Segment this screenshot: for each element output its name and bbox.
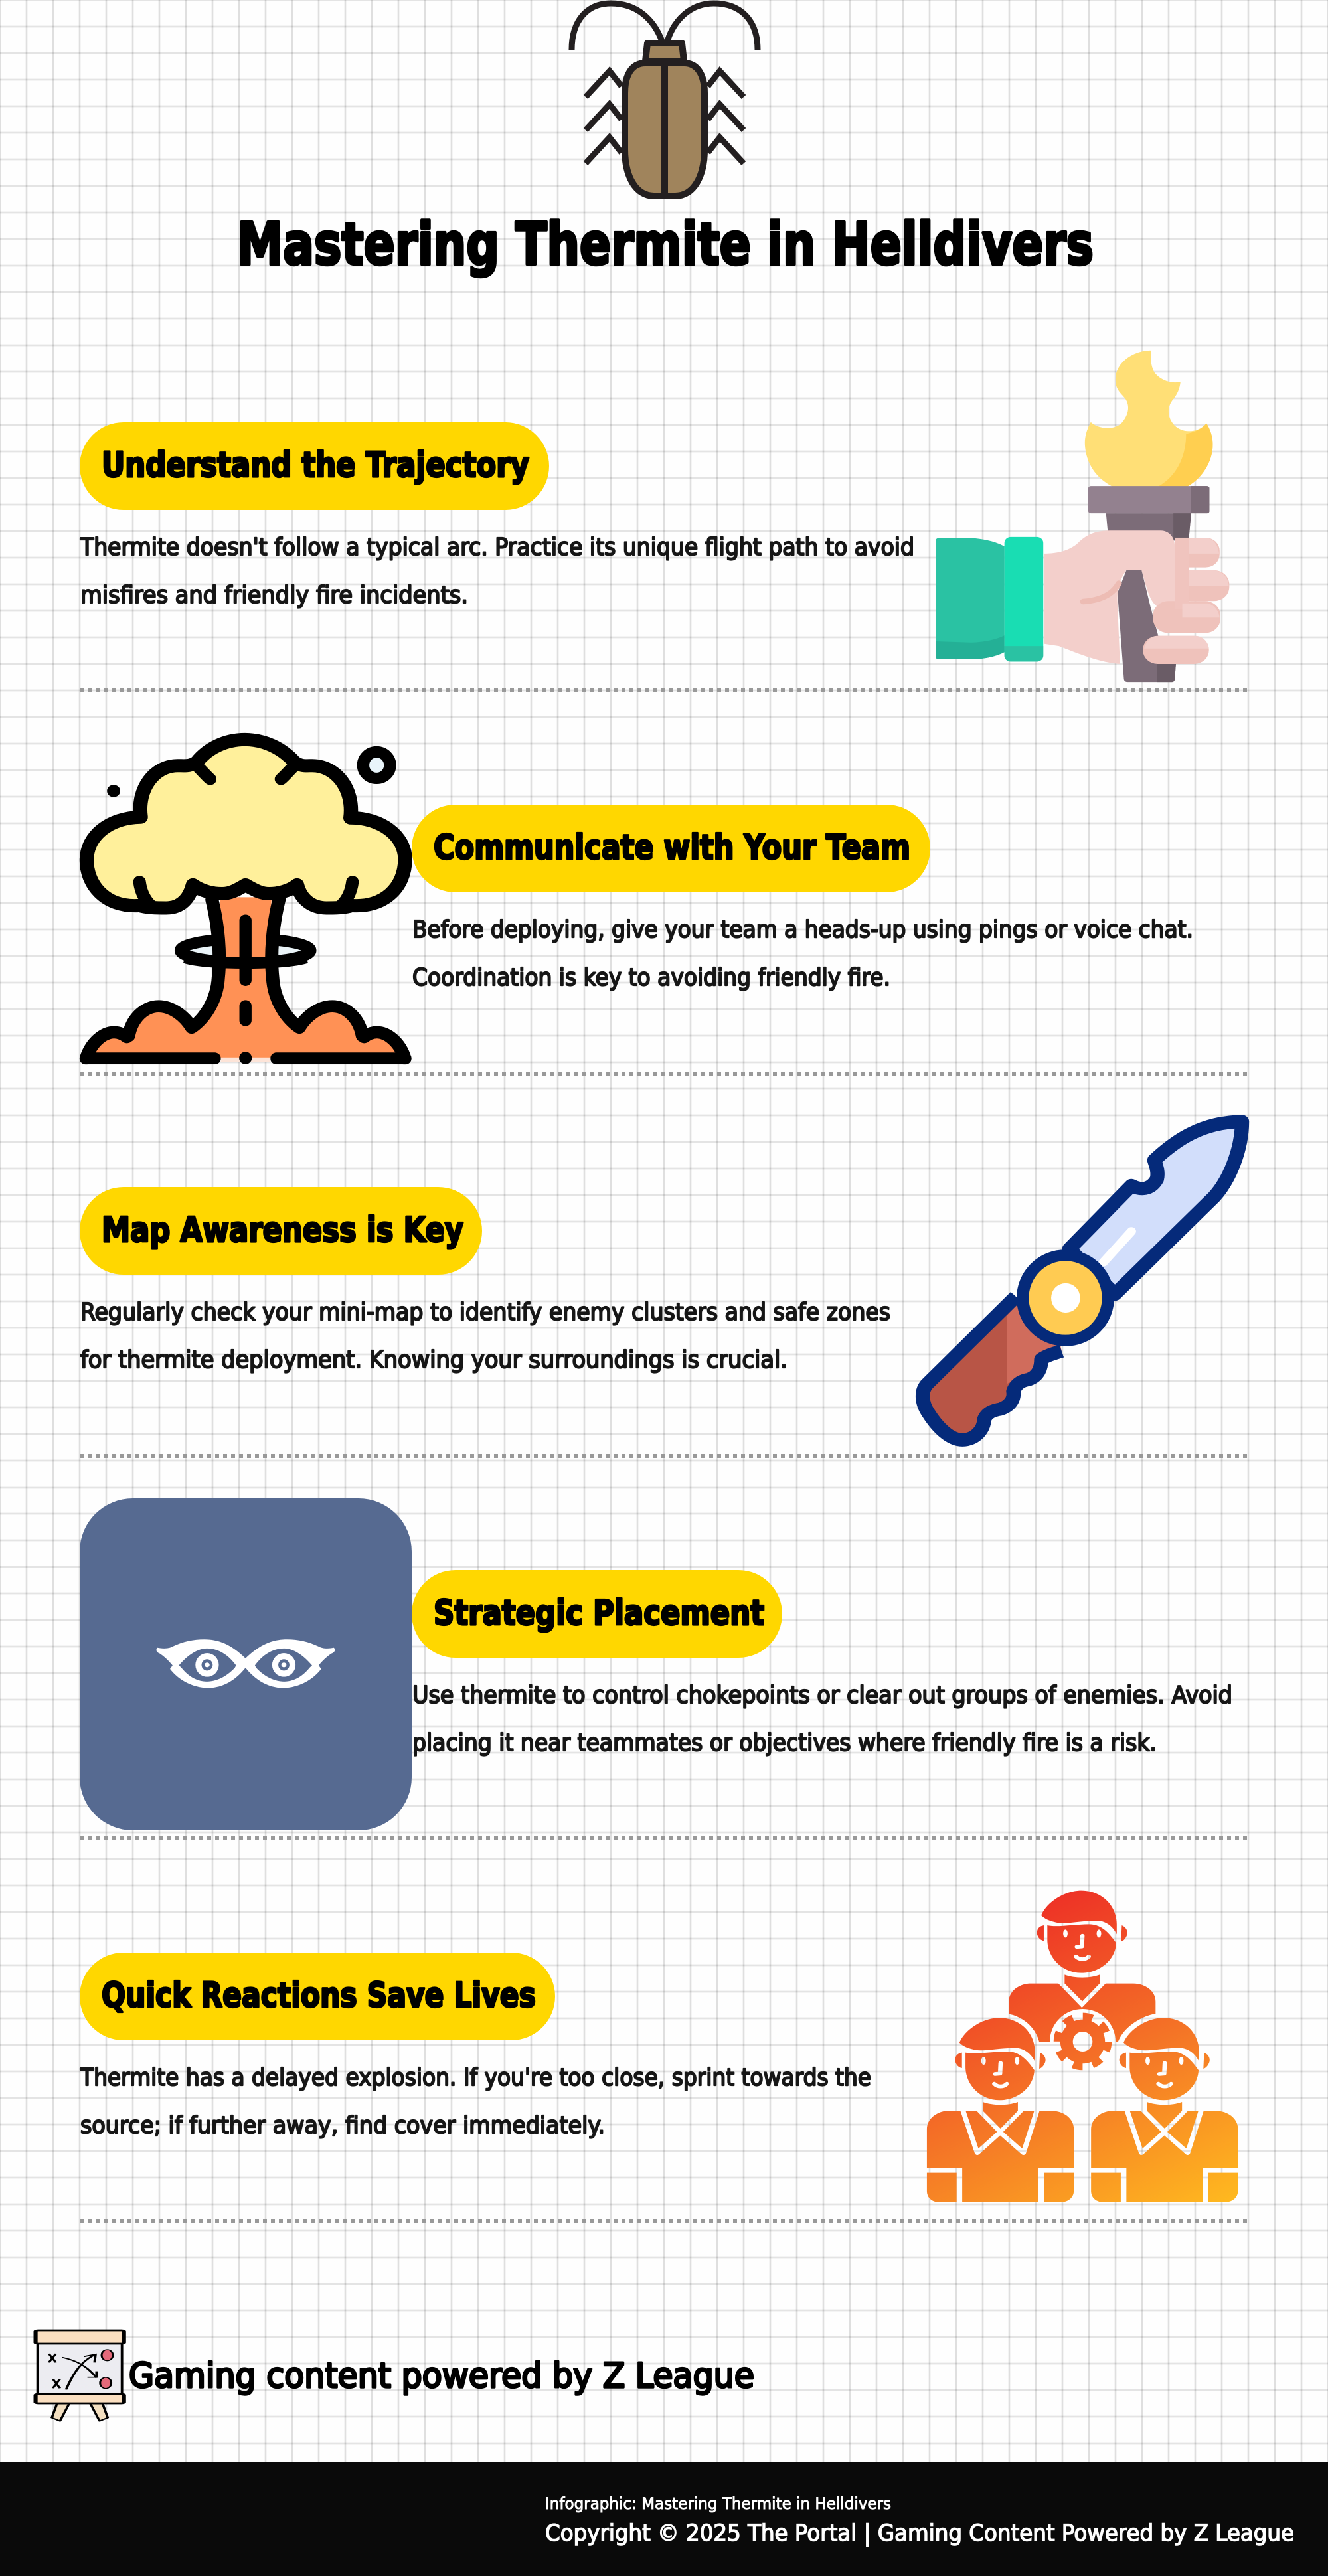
icon: mushroom cloud <box>80 740 412 1064</box>
heading pill: Communicate with Your Team <box>434 828 910 868</box>
icon: tactics board <box>36 2330 124 2421</box>
panel: communicate with your team <box>80 740 1193 1064</box>
icon: beetle <box>572 3 758 197</box>
panel: understand the trajectory <box>80 351 1229 682</box>
icon: folding knife <box>923 1121 1242 1440</box>
heading pill: Understand the Trajectory <box>102 445 529 485</box>
heading pill <box>412 805 930 892</box>
heading pill <box>80 422 549 510</box>
title: Mastering Thermite in Helldivers <box>237 210 1094 278</box>
body text: Thermite doesn't follow a typical arc. Practice its unique flight path to avoid <box>80 534 914 561</box>
body text <box>80 1299 890 1374</box>
heading pill <box>412 1570 782 1658</box>
body text <box>412 1682 1232 1757</box>
body text <box>80 534 914 609</box>
body text: Before deploying, give your team a heads-up using pings or voice chat. <box>412 916 1193 943</box>
divider: row 5 <box>80 2219 1248 2223</box>
body text: Coordination is key to avoiding friendly fire. <box>412 964 890 991</box>
body text: Use thermite to control chokepoints or clear out groups of enemies. Avoid <box>412 1682 1232 1709</box>
footer credit text: Gaming content powered by Z League <box>129 2356 754 2396</box>
body text: Regularly check your mini-map to identify enemy clusters and safe zones <box>80 1299 890 1326</box>
divider: row 3 <box>80 1454 1248 1458</box>
body text: placing it near teammates or objectives where friendly fire is a risk. <box>412 1730 1157 1757</box>
heading pill <box>80 1953 555 2040</box>
footer caption: Infographic: Mastering Thermite in Helldivers <box>545 2494 891 2513</box>
icon: eyes on blue tile <box>80 1498 412 1830</box>
icon: torch in hand <box>936 351 1229 682</box>
body text: misfires and friendly fire incidents. <box>80 582 468 609</box>
heading pill: Strategic Placement <box>434 1593 764 1633</box>
panel: strategic placement <box>80 1498 1232 1830</box>
body text: Thermite has a delayed explosion. If you're too close, sprint towards the <box>80 2064 871 2091</box>
body text: source; if further away, find cover immediately. <box>80 2112 605 2139</box>
heading pill: Quick Reactions Save Lives <box>102 1976 536 2016</box>
copyright line: Copyright © 2025 The Portal | Gaming Content Powered by Z League <box>545 2520 1294 2547</box>
divider: row 1 <box>80 688 1248 692</box>
divider: row 2 <box>80 1072 1248 1076</box>
body text: for thermite deployment. Knowing your surroundings is crucial. <box>80 1346 788 1374</box>
heading pill: Map Awareness is Key <box>102 1210 463 1250</box>
footer band <box>0 2462 1328 2576</box>
heading pill <box>80 1187 482 1275</box>
panel: map awareness <box>80 1121 1242 1440</box>
body text <box>412 916 1193 991</box>
icon: team with gear <box>927 1891 1238 2202</box>
body text <box>80 2064 871 2139</box>
panel: quick reactions <box>80 1891 1238 2202</box>
divider: row 4 <box>80 1836 1248 1840</box>
